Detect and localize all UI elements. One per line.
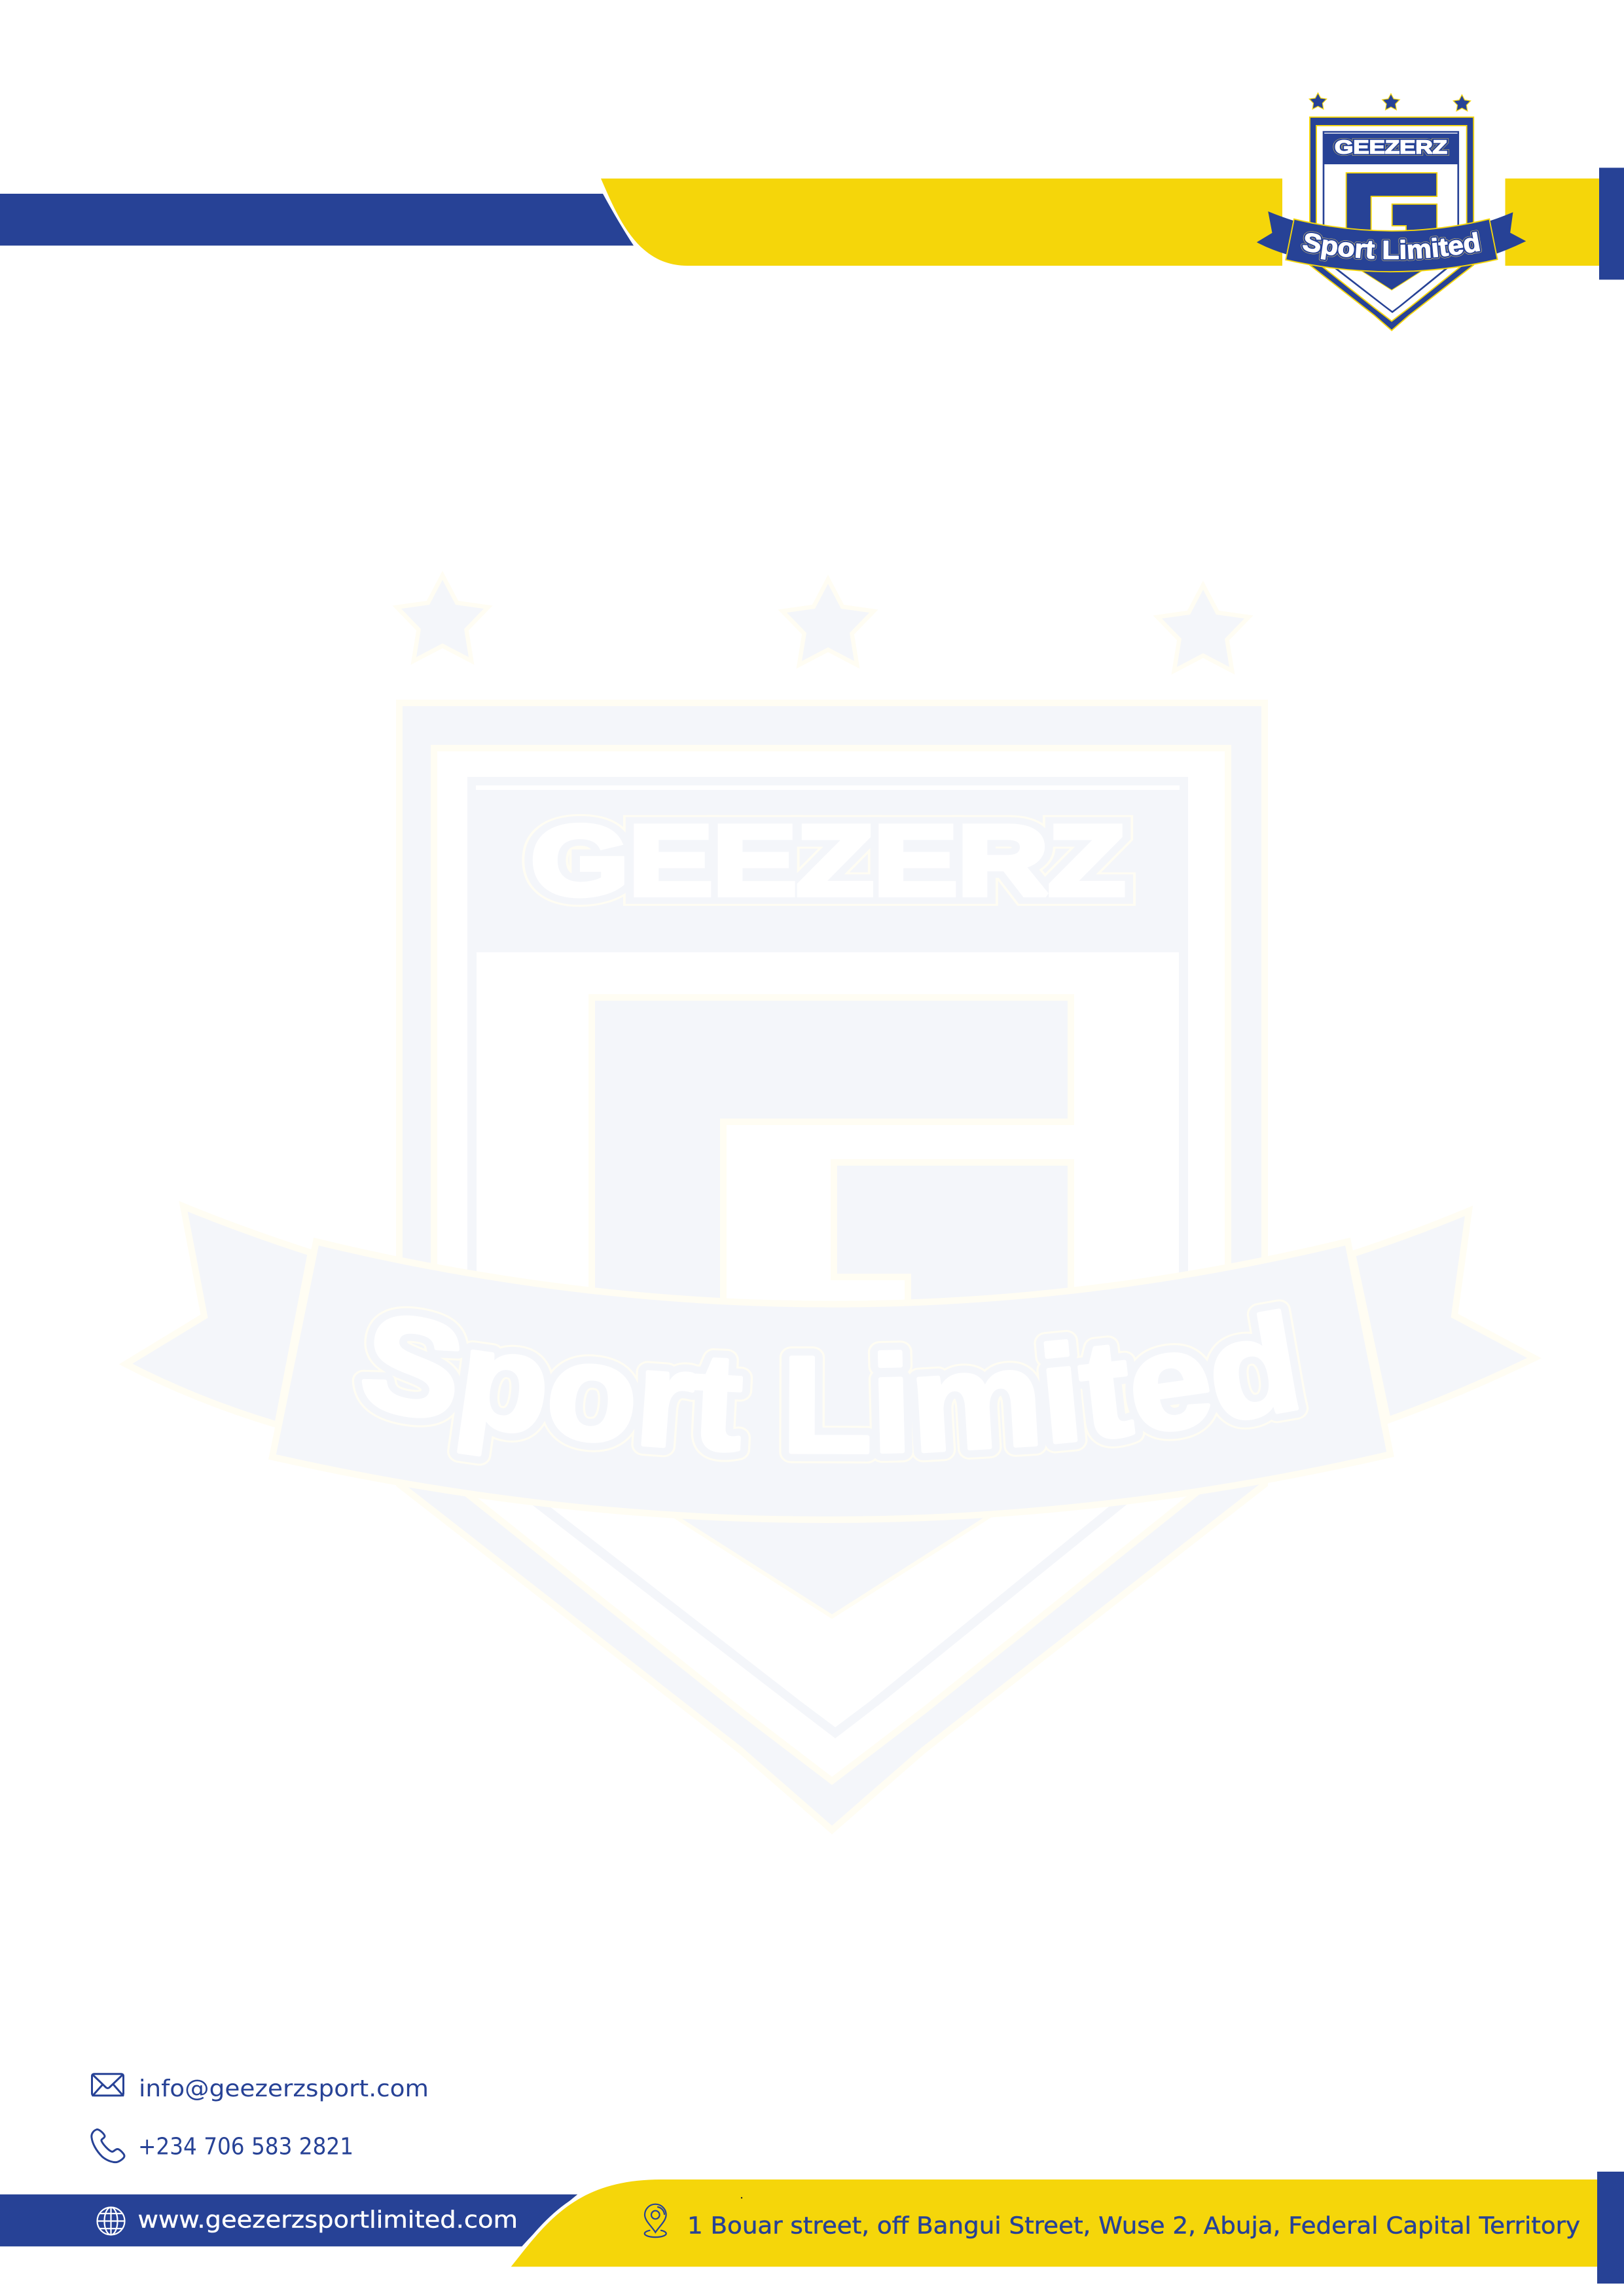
speck: [741, 2197, 742, 2198]
header blue tab: [1599, 168, 1624, 279]
phone text: +234 706 583 2821: [138, 2134, 353, 2161]
watermark name GEEZERZ: GEEZERZ: [531, 805, 1125, 916]
watermark ribbon text: Sport Limited: [354, 1301, 1307, 1463]
address text: 1 Bouar street, off Bangui Street, Wuse 2, Abuja, Federal Capital Territory: [687, 2213, 1580, 2240]
footer blue bar: [0, 2195, 577, 2246]
logo shield: [1310, 117, 1473, 331]
logo G monogram: [1346, 173, 1437, 240]
logo name GEEZERZ: GEEZERZ: [1335, 137, 1447, 158]
icon: envelope: [92, 2074, 123, 2096]
footer blue tab: [1597, 2172, 1624, 2284]
watermark stars: [401, 580, 1244, 667]
watermark shield: [399, 703, 1265, 1830]
watermark name GEEZERZ: GEEZERZ: [531, 805, 1125, 916]
logo ribbon: [1258, 212, 1525, 272]
logo ribbon text: Sport Limited: [1301, 230, 1482, 262]
logo name GEEZERZ: GEEZERZ: [1335, 137, 1447, 158]
website text: www.geezerzsportlimited.com: [137, 2206, 518, 2233]
logo ribbon text: Sport Limited: [1301, 230, 1482, 261]
footer yellow band: [511, 2179, 1598, 2267]
icon: globe: [97, 2207, 124, 2234]
header logo: [1257, 92, 1526, 331]
header blue bar: [0, 194, 634, 245]
icon: location pin: [645, 2204, 666, 2237]
header yellow band: [601, 179, 1282, 266]
icon: phone: [92, 2129, 124, 2162]
header yellow band right: [1506, 179, 1600, 266]
watermark ribbon text: Sport Limited: [362, 1309, 1299, 1457]
email text: info@geezerzsport.com: [139, 2075, 429, 2102]
logo name GEEZERZ: GEEZERZ: [1335, 137, 1447, 158]
logo stars: [1310, 94, 1470, 110]
watermark logo: [119, 571, 1541, 1834]
watermark ribbon: [126, 1206, 1534, 1520]
logo ribbon text: Sport Limited: [1303, 232, 1481, 260]
watermark G monogram: [592, 997, 1071, 1348]
watermark ribbon text: Sport Limited: [352, 1300, 1308, 1465]
watermark name GEEZERZ: GEEZERZ: [531, 805, 1125, 916]
